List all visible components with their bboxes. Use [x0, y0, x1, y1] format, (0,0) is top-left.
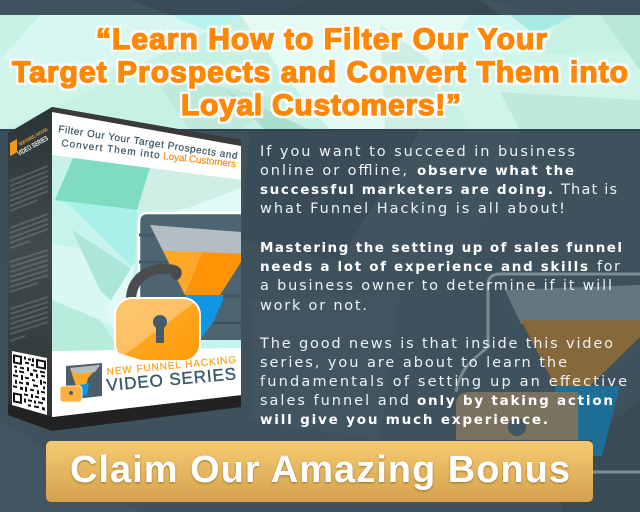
box front panel — [52, 112, 241, 417]
call-to-action button: Claim Our Amazing Bonus — [70, 449, 570, 491]
front bottom white logo band — [52, 348, 241, 417]
box headline: Convert Them into — [61, 138, 161, 161]
text block: paragraph 1: If you want to succeed in business — [260, 144, 575, 160]
spine logo: NEW FUNNEL HACKING — [18, 127, 49, 148]
text block: paragraph 1 — [260, 144, 617, 217]
spine logo — [10, 127, 50, 158]
text block: paragraph 3: series, you are about to learn the — [260, 355, 567, 371]
text block: paragraph 2: needs a lot of experience and skills — [260, 259, 588, 275]
lock icon — [115, 269, 200, 361]
text block: paragraph 3: only by taking action — [417, 393, 613, 409]
text block: paragraph 2: for — [597, 259, 620, 275]
text block: paragraph 3: sales funnel and — [260, 393, 409, 409]
logo text: VIDEO SERIES — [106, 364, 237, 395]
call-to-action button — [46, 441, 593, 502]
box top and bottom edges — [52, 107, 241, 431]
text block: paragraph 1: successful marketers are doing. — [260, 182, 553, 198]
front artwork — [52, 150, 241, 355]
text block: paragraph 3: The good news is that inside this video — [259, 336, 613, 352]
spine blurb — [10, 166, 48, 341]
mint polygon header band — [0, 15, 640, 131]
title: “Learn How to Filter Our Your — [96, 23, 547, 56]
text block: paragraph 3 — [259, 336, 627, 428]
text block: paragraph 2 — [260, 240, 622, 314]
funnel panel — [139, 213, 241, 340]
product box — [8, 107, 241, 431]
box headline: Filter Our Your Target Prospects and — [58, 124, 238, 162]
text block: paragraph 2: a business owner to determine if it will — [260, 278, 612, 294]
text block: paragraph 3: fundamentals of setting up an effective — [260, 374, 627, 390]
title — [12, 23, 628, 122]
spine logo: VIDEO SERIES — [17, 135, 50, 158]
text block: paragraph 1: observe what the — [417, 163, 574, 179]
text block: paragraph 2: work or not. — [260, 298, 367, 314]
text block: paragraph 1: what Funnel Hacking is all about! — [260, 201, 565, 217]
text block: paragraph 3: will give you much experience. — [260, 412, 548, 428]
title: Target Prospects and Convert Them into — [12, 56, 628, 89]
ghost funnel graphic in background — [456, 274, 640, 472]
box headline: Loyal Customers — [163, 151, 236, 170]
QR code — [12, 351, 47, 415]
box spine — [8, 107, 52, 431]
logo text: NEW FUNNEL HACKING — [106, 355, 237, 378]
text block: paragraph 2: Mastering the setting up of sales funnel — [260, 240, 622, 256]
text block: paragraph 1: That is — [560, 182, 617, 198]
title: Loyal Customers!” — [181, 89, 461, 122]
text block: paragraph 1: online or offline, — [260, 163, 407, 179]
logo mini icon — [60, 363, 102, 402]
